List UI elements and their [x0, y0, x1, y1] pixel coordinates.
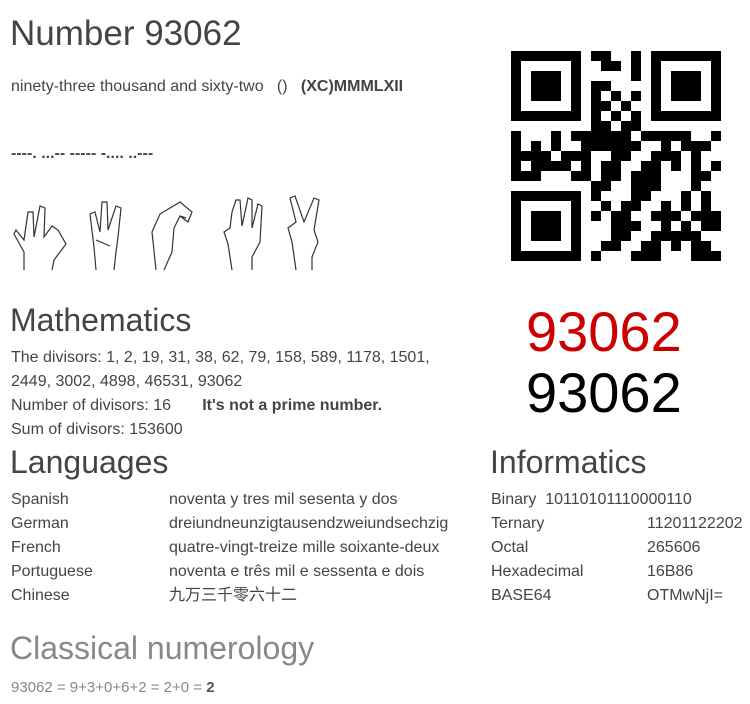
mathematics text: Sum of divisors: 153600	[11, 421, 183, 438]
QR code	[511, 51, 721, 261]
mathematics text: Number of divisors: 16 It's not a prime number.	[11, 397, 382, 414]
big black number: 93062	[526, 361, 682, 424]
languages table: noventa e três mil e sessenta e dois	[169, 563, 424, 580]
mathematics text: The divisors: 1, 2, 19, 31, 38, 62, 79, 158, 589, 1178, 1501,	[11, 349, 430, 366]
mathematics text: 2449, 3002, 4898, 46531, 93062	[11, 373, 242, 390]
languages table	[11, 491, 448, 604]
sign language hands	[13, 195, 320, 270]
informatics table: BASE64	[491, 587, 551, 604]
languages table: noventa y tres mil sesenta y dos	[169, 491, 398, 508]
mathematics text	[11, 349, 430, 438]
heading: Informatics: Informatics	[490, 444, 646, 480]
morse code: ----. ...-- ----- -.... ..---	[11, 145, 153, 162]
languages table: quatre-vingt-treize mille soixante-deux	[169, 539, 439, 556]
big red number: 93062	[526, 300, 682, 363]
title: Number 93062	[10, 14, 242, 53]
informatics table: 11201122202	[647, 515, 743, 532]
number in words and roman: ninety-three thousand and sixty-two () (XC)MMMLXII	[11, 78, 403, 95]
languages table: Portuguese	[11, 563, 93, 580]
heading: Languages: Languages	[10, 444, 168, 480]
languages table: French	[11, 539, 61, 556]
heading: Classical numerology: Classical numerology	[10, 630, 314, 666]
informatics table: 16B86	[647, 563, 693, 580]
languages table: Chinese	[11, 587, 70, 604]
languages table: German	[11, 515, 69, 532]
heading: Mathematics: Mathematics	[10, 302, 191, 338]
languages table: dreiundneunzigtausendzweiundsechzig	[169, 515, 448, 532]
informatics table: Hexadecimal	[491, 563, 583, 580]
languages table: 九万三千零六十二	[169, 587, 297, 604]
numerology text: 93062 = 9+3+0+6+2 = 2+0 = 2	[11, 679, 215, 696]
informatics table: Ternary	[491, 515, 544, 532]
languages table: Spanish	[11, 491, 69, 508]
informatics table: OTMwNjI=	[647, 587, 723, 604]
informatics table: 265606	[647, 539, 700, 556]
informatics table: Binary 10110101110000110	[491, 491, 692, 508]
informatics table: Octal	[491, 539, 528, 556]
informatics table	[491, 491, 743, 604]
